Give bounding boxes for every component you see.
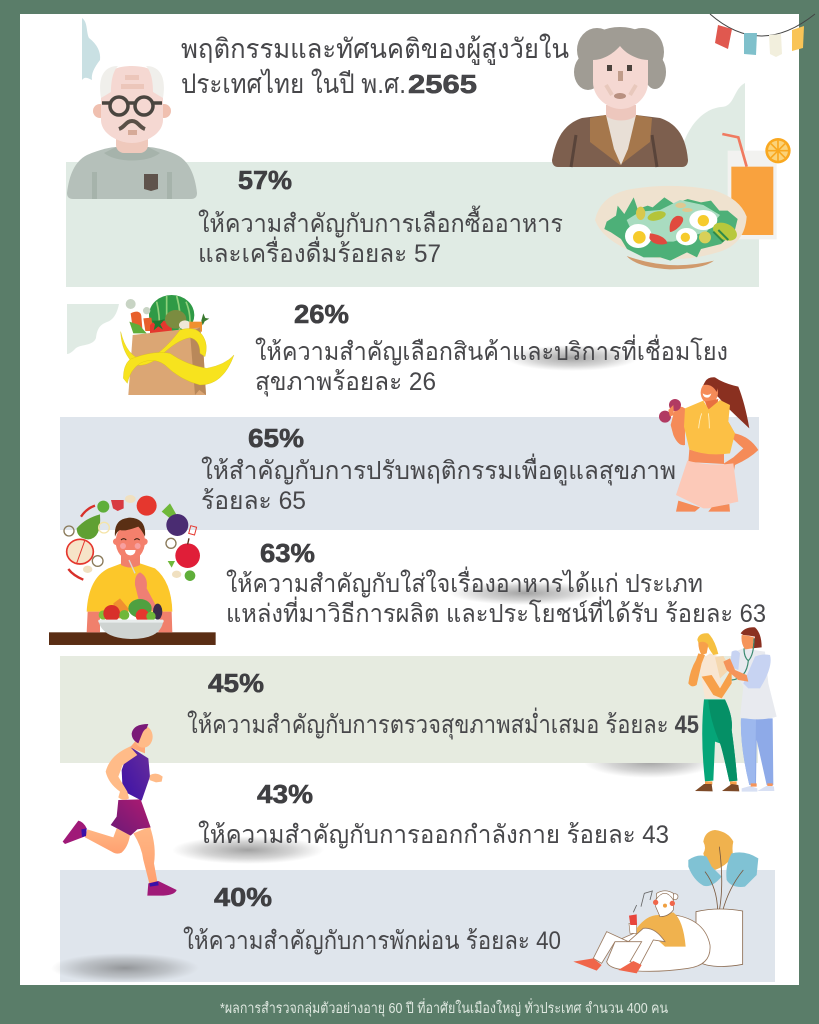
text block: 63%: ให้ความสำคัญกับใส่ใจเรื่องอาหารได้แก่ ประเภท — [226, 566, 703, 598]
text block: 26% — [255, 299, 728, 397]
footnote: *ผลการสำรวจกลุ่มตัวอย่างอายุ 60 ปี ที่อาศัยในเมืองใหญ่ ทั่วประเทศ จำนวน 400 คน — [220, 998, 668, 1017]
icon: elderly woman — [552, 27, 688, 167]
text block: 65%: ให้สำคัญกับการปรับพฤติกรรมเพื่อดูแลสุขภาพ — [201, 453, 676, 486]
icon: woman with dumbbell — [659, 377, 758, 512]
text block: 65% — [201, 423, 676, 515]
text block: 26%: สุขภาพร้อยละ 26 — [255, 368, 436, 397]
decorative blob: middle left — [67, 304, 119, 354]
text block: 40%: 40% — [214, 882, 272, 912]
text block: 40% — [183, 882, 561, 955]
band: 45% — [60, 656, 758, 763]
text block: 40%: ให้ความสำคัญกับการพักผ่อน ร้อยละ 40 — [183, 926, 561, 955]
text block: 43% — [198, 779, 669, 849]
text block: 57%: 57% — [238, 165, 292, 195]
decorative blob: right — [679, 83, 745, 162]
shadow under 45% band — [584, 746, 716, 778]
icon: runner — [63, 724, 177, 896]
title — [181, 33, 569, 99]
decorative blob: top left — [82, 18, 100, 80]
icon: patient and doctor — [688, 627, 777, 792]
icon: salad bowl — [595, 186, 747, 269]
text block: 57% — [198, 165, 563, 268]
text block: 43%: ให้ความสำคัญกับการออกกำลังกาย ร้อยละ 43 — [198, 820, 669, 849]
band: 40% — [60, 870, 775, 982]
text block: 63%: 63% — [260, 538, 315, 568]
text block: 45% — [187, 668, 699, 740]
icon: bunting flags — [710, 14, 815, 57]
band: 65% — [60, 417, 759, 530]
icon: relaxing elder with plant — [573, 830, 758, 973]
icon: grocery bag with measuring tape — [121, 295, 234, 395]
text block: 26%: ให้ความสำคัญเลือกสินค้าและบริการที่เชื่อมโยง — [255, 334, 728, 366]
icon: elderly man — [67, 66, 197, 199]
fruits ring — [64, 495, 200, 581]
text block: 63% — [226, 538, 766, 628]
icon: orange juice glass — [722, 134, 791, 239]
soft shadows — [51, 345, 638, 983]
text block: 63%: แหล่งที่มาวิธีการผลิต และประโยชน์ที่ได้รับ ร้อยละ 63 — [226, 596, 766, 628]
text block: 26%: 26% — [294, 299, 349, 329]
icon: man eating salad with fruits — [49, 495, 216, 645]
title: ประเทศไทย ในปี พ.ศ. — [181, 68, 406, 99]
text block: 57%: ให้ความสำคัญกับการเลือกซื้ออาหาร — [198, 205, 563, 238]
text block: 65%: 65% — [248, 423, 304, 453]
text block: 45%: ให้ความสำคัญกับการตรวจสุขภาพสม่ำเสมอ ร้อยละ 45 — [187, 707, 699, 740]
text block: 45%: 45% — [208, 668, 264, 698]
text block: 43%: 43% — [257, 779, 313, 809]
band: 57% — [66, 162, 759, 287]
title: พฤติกรรมและทัศนคติของผู้สูงวัยใน — [181, 33, 569, 65]
text block: 65%: ร้อยละ 65 — [201, 487, 306, 515]
text block: 57%: และเครื่องดื่มร้อยละ 57 — [198, 236, 441, 268]
title: 2565 — [408, 69, 477, 99]
